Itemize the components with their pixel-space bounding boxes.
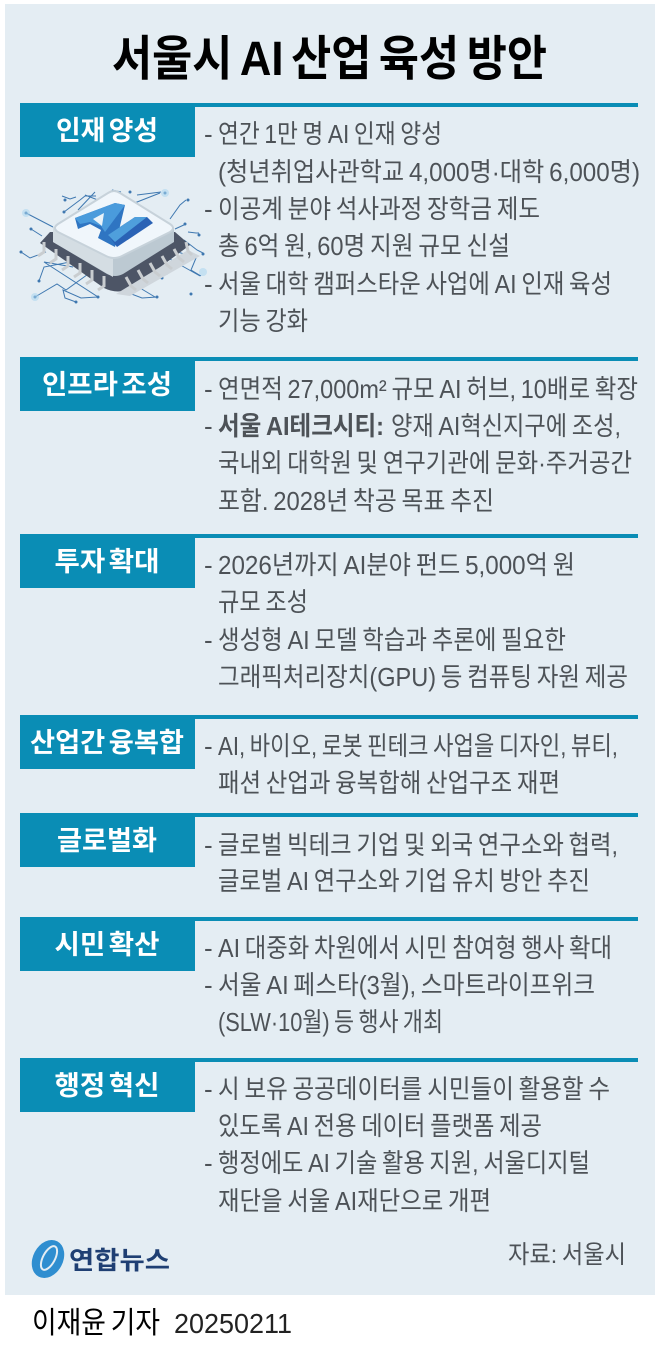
text block: 행정 혁신 items: 있도록 AI 전용 데이터 플랫폼 제공 (218, 1111, 542, 1141)
section: 글로벌화 (20, 813, 638, 896)
text block: 시민 확산 items (204, 933, 612, 1037)
logo: 연합뉴스: 연합뉴스 (69, 1247, 170, 1275)
section header: 산업간 융복합 (20, 715, 638, 769)
text block: 시민 확산 items: (SLW·10월) 등 행사 개최 (218, 1007, 443, 1037)
section header: 투자 확대 (20, 534, 638, 588)
text block: 인재 양성 items: 연간 1만 명 AI 인재 양성 (218, 119, 442, 149)
section header: 글로벌화: 글로벌화 (57, 826, 157, 856)
text block: 행정 혁신 items: 재단을 서울 AI재단으로 개편 (218, 1186, 491, 1216)
title: 서울시 AI 산업 육성 방안 (112, 33, 547, 86)
section: 인프라 조성 (20, 357, 638, 516)
text block: 글로벌화 items: 글로벌 AI 연구소와 기업 유치 방안 추진 (218, 866, 590, 896)
text block: 산업간 융복합 items (204, 731, 618, 798)
section header: 시민 확산 (20, 917, 638, 971)
text block: 시민 확산 items: - (204, 933, 213, 963)
section header: 인프라 조성 (20, 357, 638, 411)
section header: 산업간 융복합: 산업간 융복합 (30, 728, 184, 758)
text block: 글로벌화 items: 글로벌 빅테크 기업 및 외국 연구소와 협력, (218, 830, 618, 860)
credit: reporter: 이재윤 기자 (32, 1307, 160, 1340)
text block: 산업간 융복합 items: - (204, 731, 213, 761)
text block: 인프라 조성 items: - (204, 411, 213, 441)
text block: 산업간 융복합 items: 패션 산업과 융복합해 산업구조 재편 (218, 768, 560, 798)
source: 자료: 서울시 (508, 1241, 626, 1269)
section header: 글로벌화 (20, 813, 638, 867)
text block: 인재 양성 items: 총 6억 원, 60명 지원 규모 신설 (218, 231, 510, 261)
section: 투자 확대 (20, 534, 638, 692)
text block: 투자 확대 items: 규모 조성 (218, 587, 308, 617)
text block: 글로벌화 items: - (204, 830, 213, 860)
text block: 인프라 조성 items: 양재 AI혁신지구에 조성, (391, 411, 621, 441)
section: 행정 혁신 (20, 1058, 638, 1216)
text block: 행정 혁신 items: - (204, 1148, 213, 1178)
text block: 투자 확대 items: 그래픽처리장치(GPU) 등 컴퓨팅 자원 제공 (218, 662, 628, 692)
section: 시민 확산 (20, 917, 638, 1037)
text block: 시민 확산 items: 서울 AI 페스타(3월), 스마트라이프위크 (218, 970, 595, 1000)
text block: 투자 확대 items: 2026년까지 AI분야 펀드 5,000억 원 (218, 550, 575, 580)
text block: 인재 양성 items: - (204, 119, 213, 149)
text block: 글로벌화 items (204, 830, 618, 896)
text block: 시민 확산 items: - (204, 970, 213, 1000)
text block: 행정 혁신 items: 시 보유 공공데이터를 시민들이 활용할 수 (218, 1074, 610, 1104)
text block: 행정 혁신 items (204, 1074, 610, 1216)
credit: date: 20250211 (174, 1308, 292, 1339)
icon: AI chip (20, 189, 207, 304)
section header: 행정 혁신: 행정 혁신 (54, 1071, 160, 1101)
text block: 인재 양성 items: - (204, 194, 213, 224)
text block: 시민 확산 items: AI 대중화 차원에서 시민 참여형 행사 확대 (218, 933, 612, 963)
text block: 행정 혁신 items: 행정에도 AI 기술 활용 지원, 서울디지털 (218, 1148, 590, 1178)
text block: 인프라 조성 items: 포함. 2028년 착공 목표 추진 (218, 486, 494, 516)
section header: 인재 양성 (20, 103, 638, 157)
text block: 인프라 조성 items: 서울 AI테크시티: (218, 411, 384, 441)
text block: 인재 양성 items: 기능 강화 (218, 306, 308, 336)
text block: 투자 확대 items: - (204, 550, 213, 580)
text block: 인프라 조성 items: - (204, 374, 213, 404)
section header: 인프라 조성: 인프라 조성 (42, 370, 172, 400)
section header: 인재 양성: 인재 양성 (56, 116, 158, 146)
text block: 인재 양성 items: 이공계 분야 석사과정 장학금 제도 (218, 194, 540, 224)
text block: 투자 확대 items: 생성형 AI 모델 학습과 추론에 필요한 (218, 625, 566, 655)
section: 인재 양성 (20, 103, 640, 336)
section header: 투자 확대: 투자 확대 (54, 547, 160, 577)
text block: 인프라 조성 items (204, 374, 638, 516)
text block: 투자 확대 items (204, 550, 628, 692)
text block: 인재 양성 items (204, 119, 640, 336)
text block: 투자 확대 items: - (204, 625, 213, 655)
text block: 인재 양성 items: 서울 대학 캠퍼스타운 사업에 AI 인재 육성 (218, 269, 612, 299)
section header: 행정 혁신 (20, 1058, 638, 1112)
text block: 인재 양성 items: - (204, 269, 213, 299)
text block: 행정 혁신 items: - (204, 1074, 213, 1104)
logo: 연합뉴스 (25, 1234, 170, 1284)
section: 산업간 융복합 (20, 715, 638, 798)
text block: 인재 양성 items: (청년취업사관학교 4,000명·대학 6,000명) (218, 157, 640, 187)
section header: 시민 확산: 시민 확산 (54, 930, 160, 960)
